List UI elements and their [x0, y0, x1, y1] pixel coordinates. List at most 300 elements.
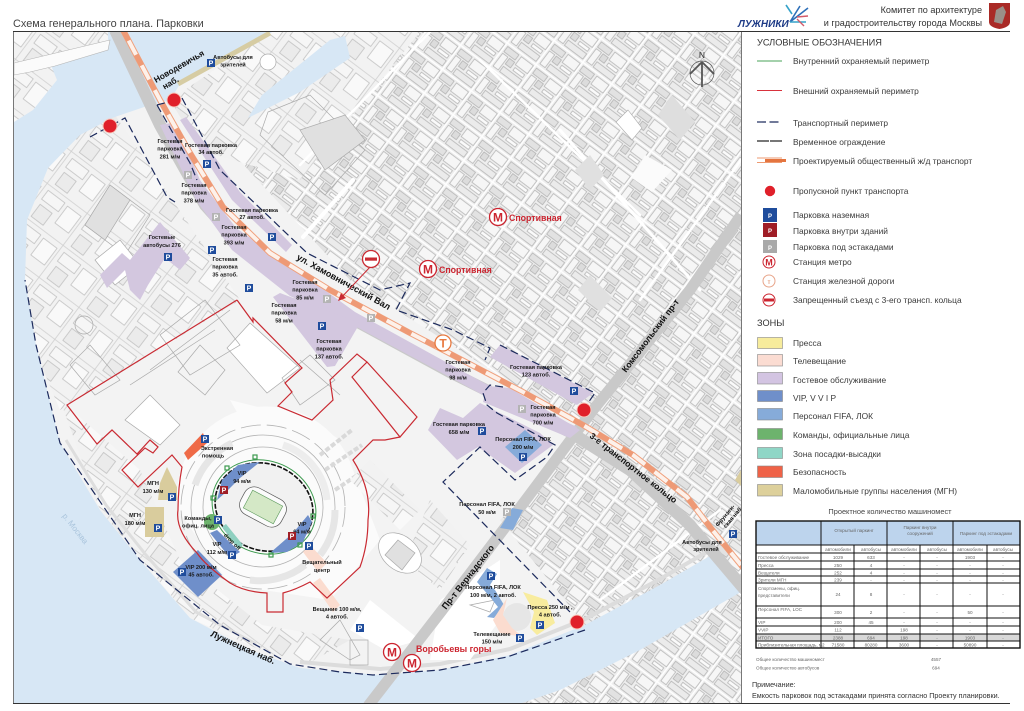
table rows: -	[936, 570, 938, 576]
ring buildings around the stadium	[181, 425, 368, 589]
icon: surface parking markers: P	[247, 286, 252, 292]
icon: surface parking markers: P	[572, 388, 577, 396]
table header text: сооружений	[907, 530, 933, 536]
icon: surface parking markers: P	[203, 436, 208, 444]
legend: planned rail: Проектируемый общественный ж/д транспорт	[793, 156, 972, 166]
table rows: -	[969, 620, 971, 625]
legend: rail station	[763, 275, 895, 287]
legend: surface parking: Парковка наземная	[793, 210, 869, 220]
legend: in-building parking	[763, 223, 888, 237]
parking labels: 100 м/м, 2 автоб.	[470, 592, 516, 599]
parking labels: зрителей	[693, 546, 719, 553]
table header text: автомобили	[891, 547, 917, 552]
legend: rail station: Станция железной дороги	[793, 276, 895, 286]
table rows: -	[1002, 578, 1004, 582]
table rows: 4	[870, 563, 873, 568]
parking labels: 150 м/м	[482, 640, 502, 646]
city texture: south bank blocks	[520, 590, 741, 703]
icon: metro Sportivnaya south	[420, 260, 492, 278]
road: Komsomolsky / Vernadsky prospect	[368, 215, 741, 706]
table rows: 250	[834, 563, 842, 568]
zone: guest service along the ring	[100, 117, 593, 473]
header: committee name: и градостроительству города Москвы	[824, 18, 982, 28]
water: Moscow river	[14, 32, 741, 703]
rail: planned public transport	[123, 30, 745, 570]
parking labels: Гостевая	[531, 405, 555, 411]
icon: Moscow coat of arms	[989, 3, 1010, 29]
parking labels: 123 автоб.	[522, 372, 551, 378]
perimeter gates	[211, 455, 315, 557]
parking labels: VIP 200 м/м	[185, 565, 217, 571]
parking labels: Телевещание	[473, 632, 511, 638]
note: Емкость парковок под эстакадами принята согласно Проекту планировки.	[752, 691, 1000, 700]
table rows: Пресса	[758, 563, 774, 568]
icon: no exit from the ring	[338, 250, 380, 301]
parking labels: 378 м/м	[184, 198, 204, 204]
parking labels: парковка	[221, 233, 248, 239]
table rows: -	[969, 578, 971, 582]
table rows: -	[903, 610, 905, 615]
icon: in-building parking markers	[220, 486, 296, 540]
parking labels: 45 автоб.	[188, 572, 214, 578]
table header text: Открытый паркинг	[834, 527, 874, 533]
parking capacity table	[756, 521, 1020, 648]
total row shading	[756, 634, 1020, 641]
transport perimeter	[25, 98, 595, 675]
stadium	[210, 454, 316, 558]
table rows: 198	[900, 628, 908, 632]
blocks north-east	[575, 95, 695, 312]
table rows: Гостевое обслуживание	[758, 555, 810, 560]
zone legend: press	[758, 338, 822, 348]
legend: under-overpass parking: P	[768, 246, 772, 252]
parking labels: 4 автоб.	[539, 612, 562, 618]
parking labels: Пресса 250 м/м ,	[527, 605, 573, 611]
legend: metro	[763, 256, 852, 268]
header: Luzhniki logo	[737, 5, 808, 30]
top rule	[13, 30, 1010, 32]
table rows: -	[1002, 642, 1004, 648]
icon: in-building parking markers: P	[290, 534, 295, 540]
parking labels: 94 м/м	[233, 479, 251, 485]
parking labels: 112 м/м	[207, 550, 227, 556]
icon: metro Vorobyovy Gory: М	[387, 646, 397, 660]
icon: surface parking markers: P	[358, 626, 363, 632]
table header text: автобусы	[927, 547, 947, 552]
icon: rail station: Т	[439, 336, 447, 350]
parking labels: МГН	[129, 513, 141, 519]
icon: under-overpass parking markers: P	[520, 406, 525, 414]
parking labels: 34 автоб.	[198, 149, 224, 156]
header: committee name: Комитет по архитектуре	[881, 5, 982, 15]
table header text: Паркинг под эстакадами	[960, 531, 1013, 536]
title: Схема генерального плана. Парковки	[13, 18, 204, 30]
parking labels: помощь	[202, 454, 225, 460]
parking labels: автобусы 276	[143, 242, 181, 249]
table rows: -	[969, 563, 971, 568]
icon: in-building parking markers: P	[222, 488, 227, 494]
table rows: -	[903, 592, 905, 597]
icon: surface parking markers: P	[480, 428, 485, 436]
parking labels: VIP	[212, 542, 222, 548]
parking labels: 137 автоб.	[315, 353, 344, 360]
parking labels: парковка	[530, 413, 557, 419]
parking labels: парковка	[157, 147, 184, 153]
legend: forbidden exit: Запрещенный съезд с 3-его трансп. кольца	[793, 295, 962, 305]
icon: surface parking markers: P	[731, 532, 736, 538]
city texture: ground along the embankment	[60, 400, 350, 668]
table header cells	[756, 521, 1020, 545]
white avenues	[300, 32, 741, 600]
table rows: 252	[834, 570, 842, 576]
zone legend: broadcasting	[758, 354, 846, 366]
icon: compass	[690, 50, 714, 87]
outer guarded perimeter	[67, 300, 417, 612]
legend: temporary fence: Временное ограждение	[793, 137, 886, 147]
table rows: -	[1002, 563, 1004, 568]
table rows: -	[936, 578, 938, 582]
parking labels: Гостевая	[317, 339, 341, 345]
parking labels: 35 автоб.	[212, 271, 238, 278]
legend: under-overpass parking	[763, 240, 894, 253]
icon: surface parking markers: P	[170, 494, 175, 502]
table rows: 1903	[965, 555, 976, 560]
table rows: -	[936, 636, 938, 640]
table header text	[825, 525, 1013, 552]
table rows: 198	[900, 636, 908, 640]
parking labels: парковка	[181, 191, 208, 197]
table rows: Зрители МГН	[758, 578, 787, 582]
table rows: VIP	[758, 620, 765, 625]
road label: Frunzenskaya: ская наб.	[722, 505, 745, 530]
table rows: -	[969, 628, 971, 632]
parking labels: парковка	[292, 288, 319, 294]
zone: security / emergency	[184, 433, 207, 460]
zone legend: drop-off: Зона посадки-высадки	[793, 449, 881, 459]
legend: under-overpass parking: Парковка под эстакадами	[793, 242, 894, 252]
table rows: -	[1002, 636, 1004, 640]
icon: surface parking markers: P	[521, 454, 526, 462]
table rows: 71580	[832, 642, 845, 648]
parking labels: Экстренная	[201, 446, 233, 452]
table grid	[756, 521, 1020, 648]
panel: map	[14, 30, 745, 706]
icon: metro Sportivnaya north	[490, 208, 562, 226]
parking labels: 4 автоб.	[326, 614, 349, 620]
stadium bowl	[214, 462, 314, 552]
road label: Vernadsky: Пр-т Вернадского	[440, 542, 496, 611]
icon: under-overpass parking markers: P	[505, 510, 510, 516]
table header text: автомобили	[957, 547, 983, 552]
legend: transport perimeter: Транспортный периметр	[793, 118, 888, 128]
table rows: -	[870, 578, 872, 582]
river label: р. Москва	[60, 512, 90, 546]
land strip north-west	[14, 40, 110, 75]
city texture: north of river pond	[170, 32, 420, 180]
icon: surface parking markers: P	[518, 636, 523, 642]
zone legend: reduced mobility: Маломобильные группы населения (МГН)	[793, 486, 957, 496]
table rows: 2	[870, 610, 873, 615]
parking labels: VIP	[237, 471, 247, 477]
parking labels: офиц. лица	[182, 522, 215, 530]
table rows: 50890	[964, 642, 977, 648]
legend: checkpoint: Пропускной пункт транспорта	[793, 186, 909, 196]
table rows: 8	[870, 592, 873, 597]
icon: surface parking markers	[154, 59, 737, 642]
parking labels: Автобусы для	[682, 540, 722, 546]
legend heading: УСЛОВНЫЕ ОБОЗНАЧЕНИЯ	[757, 38, 882, 48]
icon: surface parking markers: P	[270, 234, 275, 242]
VIP stand south-east	[270, 515, 312, 553]
zones heading: ЗОНЫ	[757, 318, 784, 328]
parking labels: drop off	[222, 533, 241, 552]
icon: surface parking markers: P	[205, 162, 210, 168]
table rows: 4	[870, 570, 873, 576]
parking labels: 700 м/м	[533, 420, 553, 426]
table rows: -	[903, 578, 905, 582]
table rows: -	[1002, 610, 1004, 615]
icon: surface parking markers: P	[210, 248, 215, 254]
icon: surface parking markers: P	[230, 552, 235, 560]
map frame	[14, 32, 742, 703]
zone legend: VIP: VIP, V V I P	[793, 393, 837, 403]
table rows: 80280	[865, 642, 878, 648]
table rows: 2388	[833, 636, 844, 640]
parking labels: Команды,	[184, 516, 212, 522]
table rows: 1029	[833, 555, 844, 560]
icon: metro Vorobyovy Gory	[384, 644, 491, 672]
table header text: автомобили	[825, 547, 851, 552]
table rows: 24	[835, 592, 841, 597]
table rows: 50	[967, 610, 973, 615]
legend: metro: Станция метро	[793, 257, 852, 267]
table rows: Персонал FIFA, LOC	[758, 607, 803, 612]
parking labels: Гостевая парковка	[510, 365, 562, 371]
table rows: 3600	[899, 642, 910, 648]
parking labels: Вещание 100 м/м,	[313, 607, 361, 613]
icon: surface parking markers: P	[216, 518, 221, 524]
table rows: 633	[867, 555, 875, 560]
table rows: 45	[868, 620, 874, 625]
road label: Khamovnichesky Val: ул. Хамовнический Вал	[295, 252, 392, 312]
parking labels: парковка	[316, 347, 343, 353]
zone: drop-off	[222, 524, 243, 549]
table header text: автобусы	[993, 547, 1013, 552]
table rows: -	[903, 555, 905, 560]
parking labels: зрителей	[220, 62, 246, 68]
icon: compass: N	[699, 50, 705, 60]
parking labels: Гостевая	[446, 360, 470, 366]
table rows: 694	[867, 636, 875, 640]
panel: legend	[757, 38, 972, 496]
parking labels: центр	[314, 568, 331, 574]
road: embankment beige	[178, 33, 270, 84]
table rows: представители	[758, 593, 790, 598]
parking labels: 58 м/м	[275, 318, 293, 324]
icon: metro Vorobyovy Gory: М	[407, 656, 417, 670]
icon: metro Sportivnaya south: Спортивная	[439, 265, 492, 275]
table rows: 1903	[965, 636, 976, 640]
table rows: Спортсмены, офиц.	[758, 586, 800, 591]
table rows: -	[936, 642, 938, 648]
icon: surface parking markers: P	[166, 254, 171, 262]
zone legend: guest service	[758, 372, 887, 385]
parking labels: парковка	[212, 265, 239, 271]
icon: surface parking markers: P	[209, 60, 214, 68]
note	[752, 680, 1000, 700]
parking labels: Автобусы для	[213, 55, 253, 61]
parking labels: Гостевая парковка	[226, 208, 278, 214]
city texture: south-east blocks	[502, 432, 709, 625]
table rows: -	[969, 592, 971, 597]
table rows	[758, 555, 1004, 648]
road: Third Ring	[115, 30, 745, 590]
road label: Komsomolsky: Комсомольский пр-т	[620, 296, 682, 374]
park near convent	[260, 54, 365, 195]
legend: in-building parking: P	[768, 229, 772, 235]
zone legend: security: Безопасность	[793, 467, 847, 477]
table rows: -	[1002, 570, 1004, 576]
icon: surface parking markers: P	[180, 570, 185, 576]
parking labels: Вещательный	[302, 560, 342, 566]
icon: transport checkpoints	[103, 93, 591, 629]
zone legend: FIFA staff: Персонал FIFA, ЛОК	[793, 411, 873, 421]
table rows: -	[936, 610, 938, 615]
south-side buildings	[320, 460, 531, 665]
zone legend: VIP	[758, 390, 837, 403]
icon: under-overpass parking markers: P	[214, 214, 219, 222]
table rows: 239	[834, 578, 842, 582]
bottom rule	[13, 702, 1010, 704]
table rows: -	[903, 570, 905, 576]
parking labels: Гостевая	[272, 303, 296, 309]
table title: Проектное количество машиномест	[828, 507, 952, 516]
parking labels: 200 м/м	[513, 445, 533, 451]
zone legend: FIFA staff	[758, 408, 873, 421]
zone: broadcasting	[303, 545, 523, 637]
zone legend: guest service: Гостевое обслуживание	[793, 375, 887, 385]
zone: VIP lots	[173, 530, 240, 597]
road label: Novodevichya: Новодевичья	[152, 48, 206, 85]
zone legend: teams	[758, 428, 910, 440]
header: Luzhniki logo: ЛУЖНИКИ	[737, 19, 789, 30]
table rows: -	[1002, 628, 1004, 632]
parking labels: Гостевая парковка	[185, 143, 237, 149]
zone: reduced mobility	[145, 467, 177, 537]
zone legend: broadcasting: Телевещание	[793, 356, 846, 366]
table totals: Общее количество автобусов	[756, 666, 820, 670]
parking labels: 85 м/м	[296, 295, 314, 301]
zone legend: press: Пресса	[793, 338, 822, 348]
zone: FIFA staff	[477, 430, 542, 618]
parking labels: парковка	[271, 311, 298, 317]
icon: surface parking markers: P	[320, 324, 325, 330]
table rows: -	[936, 563, 938, 568]
parking labels	[125, 54, 722, 646]
table rows: VVIP	[758, 628, 768, 632]
icon: metro Sportivnaya south: М	[423, 262, 433, 276]
parking labels: 180 м/м	[125, 521, 145, 527]
green perimeter	[212, 459, 316, 555]
zone legend: teams: Команды, официальные лица	[793, 430, 910, 440]
table rows: -	[936, 628, 938, 632]
table rows: 112	[834, 628, 842, 632]
city texture: north-east blocks	[230, 32, 741, 590]
table rows: -	[1002, 592, 1004, 597]
parking labels: Гостевая	[293, 280, 317, 286]
VIP stand north-west	[217, 462, 260, 500]
table rows: 300	[834, 610, 842, 615]
icon: metro Sportivnaya north: Спортивная	[509, 213, 562, 223]
parking labels: Гостевая	[158, 139, 182, 145]
icon: under-overpass parking markers	[184, 171, 526, 516]
Luzhniki white grounds	[70, 184, 340, 446]
parking labels: Гостевая	[213, 257, 237, 263]
icon: surface parking markers: P	[307, 544, 312, 550]
legend: outer perimeter: Внешний охраняемый периметр	[793, 86, 919, 96]
legend: metro: М	[765, 258, 773, 268]
embankment promenade west	[66, 440, 256, 644]
icon: surface parking markers: P	[156, 526, 161, 532]
header: committee name	[824, 5, 982, 28]
zone legend: drop-off	[758, 448, 881, 459]
pitch	[239, 486, 287, 528]
legend: surface parking: P	[768, 214, 772, 220]
icon: under-overpass parking markers: P	[369, 316, 374, 322]
table rows: -	[936, 592, 938, 597]
table rows: -	[936, 555, 938, 560]
icon: surface parking markers: P	[489, 574, 494, 580]
parking labels: 393 м/м	[224, 240, 244, 246]
parking labels: 64 м/м	[293, 530, 311, 536]
city texture: north-west blocks	[14, 115, 240, 410]
parking labels: VIP	[297, 522, 307, 528]
zone: press	[523, 592, 555, 635]
beige bus zone bank	[735, 470, 741, 486]
table rows: -	[1002, 555, 1004, 560]
icon: rail station	[435, 335, 451, 351]
table rows: 200	[834, 620, 842, 625]
parking labels: 50 м/м	[478, 510, 496, 516]
zone legend: security	[758, 466, 847, 478]
icon: surface parking markers: P	[538, 622, 543, 630]
zone: teams	[204, 514, 220, 530]
road label: Novodevichya: наб.	[160, 74, 180, 91]
icon: under-overpass parking markers: P	[325, 296, 330, 304]
parking labels: Гостевая	[182, 183, 206, 189]
parking labels: 130 м/м	[143, 489, 163, 495]
parking labels: 27 автоб.	[239, 214, 265, 221]
parking labels: 658 м/м	[449, 430, 469, 436]
parking labels: Персонал FIFA, ЛОК	[459, 502, 515, 508]
legend: inner perimeter: Внутренний охраняемый периметр	[793, 56, 930, 66]
road label: Luzhnetskaya: Лужнецкая наб.	[209, 629, 277, 666]
table header text: Паркинг внутри	[904, 525, 936, 530]
legend: in-building parking: Парковка внутри зданий	[793, 226, 888, 236]
table totals: 4557	[931, 657, 942, 662]
note: Примечание:	[752, 680, 796, 689]
parking labels: Персонал FIFA, ЛОК	[465, 585, 521, 591]
table header text: автобусы	[861, 547, 881, 552]
icon: under-overpass parking markers: P	[186, 172, 191, 180]
table rows: Вещатели	[758, 570, 780, 576]
table rows: Приблизительная площадь, м2	[758, 642, 825, 648]
table rows: -	[936, 620, 938, 625]
table rows: ИТОГО	[758, 636, 774, 640]
table totals: 694	[932, 666, 940, 670]
parking labels: Персонал FIFA, ЛОК	[495, 437, 551, 443]
parking labels: Гостевая парковка	[433, 422, 485, 428]
